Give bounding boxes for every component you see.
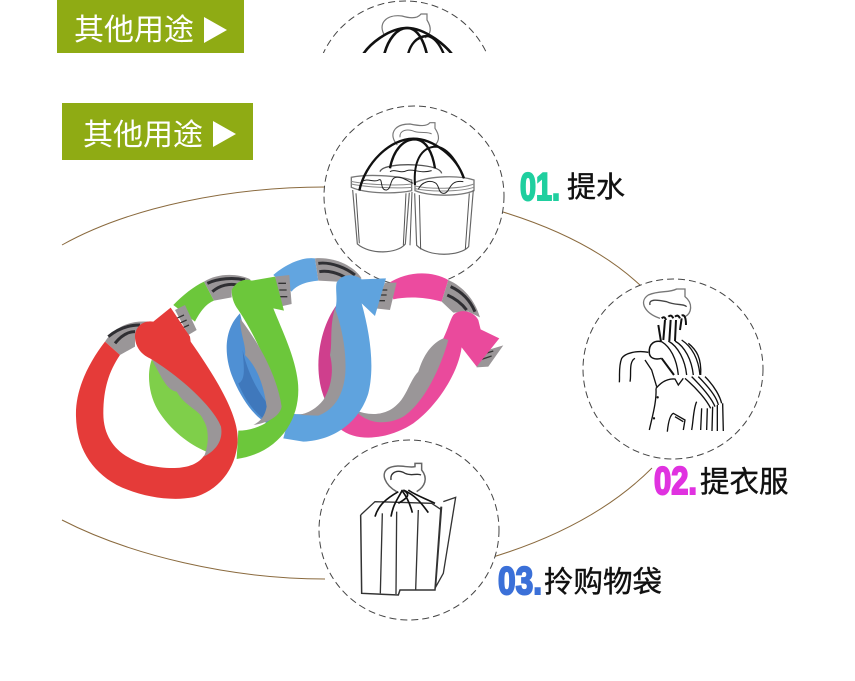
label 03: 03. [498,560,542,603]
icon: shopping bag sketch [361,463,456,595]
dashed circle: shopping bags [319,440,499,620]
section banner [62,103,253,160]
label 03 [498,560,662,603]
handle: red [76,305,238,499]
label 02 [654,460,789,503]
section banner: 其他用途 [83,119,203,152]
dashed circle: clothes [583,279,763,459]
cropped top banner: 其他用途 [74,14,194,47]
label 02: 提衣服 [700,466,789,499]
label 03: 拎购物袋 [544,566,662,599]
dashed circle: water buckets [324,106,504,286]
icon: clothes sketch [619,289,723,432]
label 01 [520,166,625,209]
product: four coloured bag handles [76,258,503,499]
cropped top banner [57,0,244,53]
handle: green [149,275,298,459]
handle: pink [318,273,503,438]
connector ellipse lines [62,187,652,579]
cropped top circle illustration [322,0,486,53]
label 02: 02. [654,460,697,503]
handle: blue [227,258,397,442]
label 01: 提水 [567,171,625,204]
label 01: 01. [520,166,560,209]
icon: bucket sketch [351,123,474,254]
